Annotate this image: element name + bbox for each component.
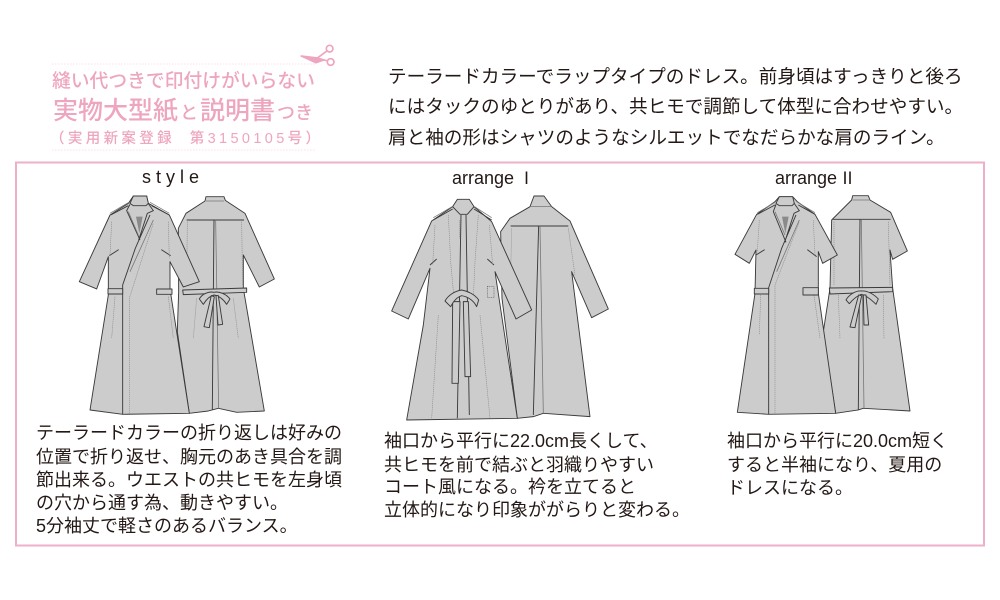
back view — [177, 197, 274, 413]
text block: style description: テーラードカラーの折り返しは好みの — [36, 423, 342, 443]
text block: description: 肩と袖の形はシャツのようなシルエットでなだらかな肩のライン。 — [388, 127, 945, 148]
text block: arrange II description: ドレスになる。 — [727, 478, 853, 498]
text block: description: にはタックのゆとりがあり、共ヒモで調節して体型に合わせやすい。 — [388, 96, 963, 117]
front view — [79, 196, 199, 414]
heading: arrange I: Ⅰ — [518, 169, 535, 188]
text block: arrange I description: コート風になる。衿を立てると — [384, 477, 636, 497]
panel: pattern notice — [50, 45, 334, 150]
back view — [823, 196, 910, 413]
text block: description: テーラードカラーでラップタイプのドレス。前身頃はすっきりと後ろ — [388, 66, 963, 87]
text block: arrange I description: 袖口から平行に22.0cm長くして、 — [384, 431, 658, 451]
icon: scissors — [301, 45, 334, 65]
text block: style description: 5分袖丈で軽さのあるバランス。 — [36, 516, 298, 536]
text block: arrange II description: すると半袖になり、夏用の — [727, 455, 942, 475]
text block: description — [388, 66, 963, 148]
notice line 1: 縫い代つきで印付けがいらない — [52, 70, 315, 91]
front view — [735, 197, 837, 414]
notice line 2: 実物大型紙と説明書つき — [53, 97, 313, 125]
illustration: arrange II dress — [735, 196, 910, 414]
text block: style description — [36, 423, 342, 536]
illustration: arrange I dress — [392, 196, 608, 420]
text block: arrange I description: 立体的になり印象ががらりと変わる。 — [384, 500, 690, 520]
text block: arrange I description — [384, 431, 690, 520]
panel: frame — [16, 162, 984, 546]
heading: style: style — [142, 167, 199, 187]
text block: style description: 節出来る。ウエストの共ヒモを左身頃 — [36, 470, 342, 490]
back view — [501, 196, 608, 418]
illustration: style dress — [79, 196, 274, 414]
notice line 3: （実用新案登録 第3150105号） — [50, 129, 320, 147]
heading: arrange I: arrange — [452, 168, 514, 188]
text block: style description: の穴から通す為、動きやすい。 — [36, 493, 288, 513]
heading: arrange II: Ⅱ — [839, 169, 856, 188]
text block: style description: 位置で折り返せ、胸元のあき具合を調 — [36, 447, 342, 467]
text block: arrange II description: 袖口から平行に20.0cm短く — [727, 431, 948, 451]
text block: arrange I description: 共ヒモを前で結ぶと羽織りやすい — [384, 455, 654, 475]
front view — [392, 199, 532, 420]
heading: arrange II: arrange — [775, 168, 837, 188]
text block: arrange II description — [727, 431, 948, 498]
